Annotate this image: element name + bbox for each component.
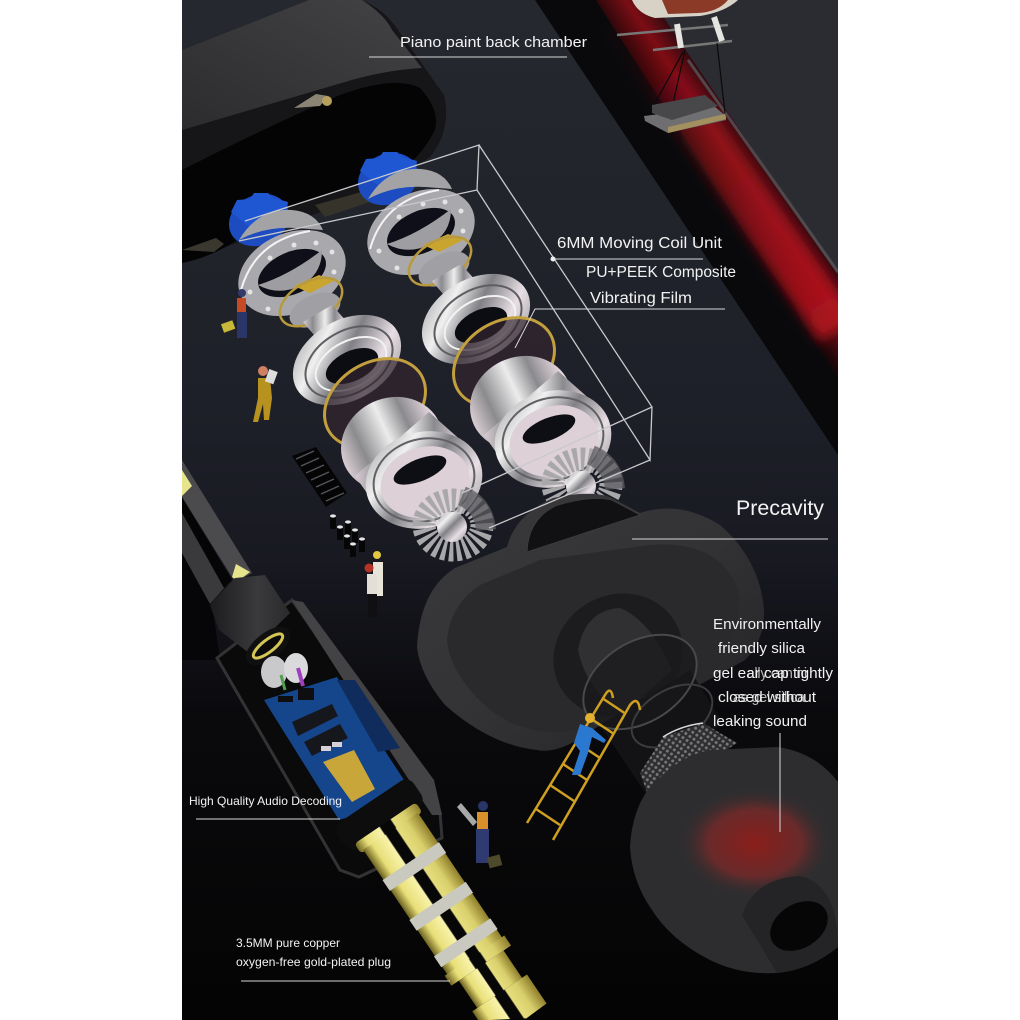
icon: helicopter carrying chip bbox=[617, 0, 738, 133]
label: PU+PEEK vibrating film: Vibrating Film bbox=[590, 290, 692, 307]
photo panel background bbox=[182, 0, 856, 1020]
label: piano paint back chamber: Piano paint back chamber bbox=[400, 34, 587, 51]
piano paint back chamber shell bbox=[182, 0, 446, 263]
worker figures near stack bbox=[221, 289, 383, 618]
worker climbing ladder bbox=[572, 713, 606, 775]
label: 6mm moving coil unit bbox=[550, 235, 723, 262]
dark diagonal surface with red stripe bbox=[535, 0, 856, 455]
heat sink strip parts bbox=[292, 447, 347, 507]
cable bbox=[182, 460, 252, 660]
label: silica gel ear cap: gel ear cap tightly bbox=[713, 665, 834, 682]
label: 3.5mm gold plated plug: 3.5MM pure copper bbox=[236, 936, 340, 950]
label: precavity: Precavity bbox=[736, 497, 825, 520]
label: silica gel ear cap: closed without bbox=[718, 689, 817, 706]
jack housing bbox=[210, 575, 442, 877]
label: silica gel ear cap: leaking sound bbox=[713, 713, 807, 730]
label: silica gel ear cap: friendly silica bbox=[718, 640, 806, 657]
box outline around driver units bbox=[239, 145, 652, 528]
label: silica gel ear cap: ally can ni bbox=[747, 665, 807, 682]
label: silica gel ear cap: as gel silica bbox=[733, 689, 806, 706]
label: high quality audio decoding: High Quality Audio Decoding bbox=[189, 794, 342, 808]
label: 3.5mm gold plated plug bbox=[236, 936, 450, 981]
label: silica gel ear cap: Environmentally bbox=[713, 616, 822, 633]
worker with wrench bbox=[457, 801, 502, 868]
label: 3.5mm gold plated plug: oxygen-free gold-plated plug bbox=[236, 955, 391, 969]
blue decoder circuit board bbox=[264, 677, 415, 820]
gold plated 3.5mm plug bbox=[346, 780, 546, 1020]
label: silica gel ear cap bbox=[713, 616, 834, 832]
earbud shell precavity bbox=[417, 494, 764, 751]
silicone nozzle bbox=[554, 594, 737, 793]
silicone ear tip bbox=[630, 747, 838, 973]
small capacitor parts bbox=[330, 514, 365, 557]
moving coil unit: left stack bbox=[220, 184, 493, 550]
moving coil unit: right stack bbox=[349, 143, 622, 509]
yellow ladder bbox=[527, 691, 640, 840]
label: 6mm moving coil unit: 6MM Moving Coil Unit bbox=[557, 235, 723, 252]
label: PU+PEEK vibrating film: PU+PEEK Composite bbox=[586, 264, 736, 281]
label: PU+PEEK vibrating film bbox=[515, 264, 736, 348]
